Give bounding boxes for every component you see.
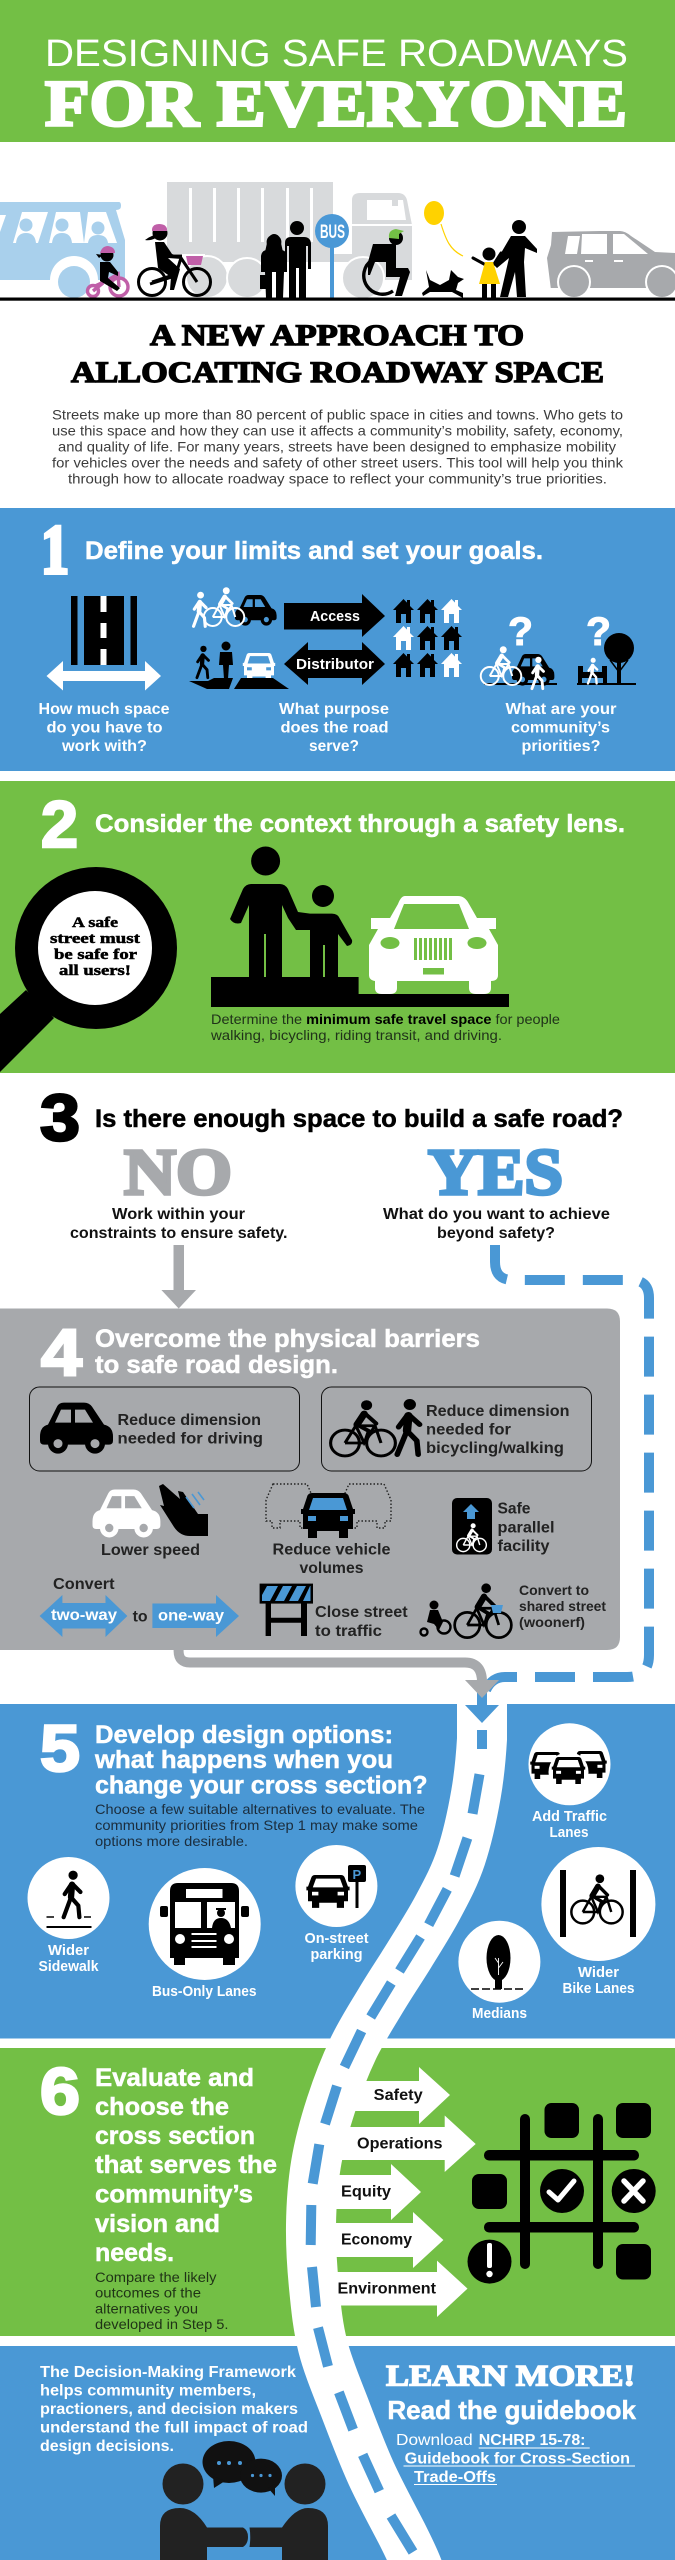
- option: add traffic lanes: Add Traffic: [532, 1808, 607, 1825]
- framework text: helps community members,: [40, 2382, 256, 2400]
- panel: step 3: [40, 1080, 623, 1308]
- question: priorities: priorities?: [522, 738, 600, 755]
- question: space: [38, 701, 170, 755]
- box: reduce bicycling and walking dimension: Reduce dimension: [426, 1403, 570, 1420]
- download link: NCHRP 15-78:: [479, 2432, 586, 2449]
- option: reduce vehicle volumes: [266, 1484, 391, 1577]
- icon: people talking: [160, 2441, 328, 2560]
- title line 1: DESIGNING SAFE ROADWAYS: [45, 33, 628, 75]
- bus stop sign: [315, 214, 349, 298]
- step 6 body: alternatives you: [95, 2300, 198, 2316]
- icon: magnifying glass: A safe: [72, 915, 119, 931]
- icon: magnifying glass: all users!: [59, 963, 131, 979]
- box: reduce bicycling and walking dimension: [322, 1387, 592, 1471]
- arrow: safety: [340, 2067, 450, 2124]
- truck: [167, 182, 412, 299]
- step 5 body: Choose a few suitable alternatives to evaluate. The: [95, 1801, 425, 1817]
- step 4 heading: to safe road design.: [95, 1351, 338, 1379]
- step number 4: 4: [41, 1315, 82, 1389]
- icon: distributor users: [189, 642, 289, 689]
- answer: yes: YES: [428, 1136, 563, 1209]
- option: close street: Close street: [315, 1604, 408, 1621]
- panel: step 2: [0, 781, 675, 1073]
- box: reduce driving dimension: needed for driving: [118, 1430, 263, 1448]
- step 2 heading: Consider the context through a safety lens.: [95, 810, 625, 838]
- couple walking: [260, 221, 311, 298]
- option: wider sidewalk: [28, 1857, 110, 1975]
- arrow: equity: [320, 2164, 421, 2220]
- option: reduce vehicle volumes: volumes: [300, 1560, 364, 1577]
- option: convert two-way to one-way: [40, 1576, 239, 1637]
- arrow: environment: Environment: [338, 2280, 437, 2298]
- road centre dashes: [311, 1730, 482, 2552]
- subtitle: [71, 319, 604, 389]
- option: on-street parking: parking: [310, 1946, 362, 1963]
- question: purpose: What purpose: [279, 701, 389, 718]
- subtitle: A NEW APPROACH TO: [150, 319, 524, 352]
- step 5 heading: [94, 1721, 428, 1800]
- option: lower speed: [92, 1484, 208, 1559]
- icon: houses: [393, 599, 462, 677]
- step 6 heading: that serves the: [95, 2151, 277, 2179]
- option: wider sidewalk: Wider: [48, 1942, 89, 1959]
- caption: Determine the minimum safe travel space for people: [211, 1011, 560, 1027]
- step 5 body: options more desirable.: [95, 1833, 248, 1849]
- question: space: work with?: [61, 738, 147, 755]
- intro paragraph: through how to allocate roadway space to reflect your community’s true priorities.: [68, 470, 607, 486]
- step number 5: 5: [40, 1711, 80, 1785]
- arrow: access: [284, 594, 385, 637]
- option: convert two-way to one-way: one-way: [158, 1608, 224, 1624]
- step 6 heading: cross section: [95, 2122, 255, 2150]
- question: priorities: community’s: [511, 720, 610, 736]
- step 6 heading: [95, 2064, 277, 2267]
- step 6 body: outcomes of the: [95, 2284, 201, 2300]
- question: purpose: does the road: [280, 720, 388, 736]
- learn more heading: LEARN MORE!: [386, 2360, 635, 2392]
- woman cycling: [138, 224, 210, 296]
- icon: adult and child on sidewalk: [211, 846, 509, 1007]
- option: convert two-way to one-way: two-way: [51, 1607, 117, 1624]
- no text: Work within your: [112, 1206, 245, 1223]
- box: reduce driving dimension: [30, 1387, 300, 1471]
- adult pedestrian: [494, 220, 537, 297]
- road line: [0, 298, 675, 301]
- wheelchair user: [364, 229, 410, 296]
- arrow: economy: Economy: [341, 2232, 412, 2248]
- icon: magnifying glass: be safe for: [54, 947, 138, 963]
- option: shared street: [420, 1583, 607, 1638]
- box: reduce bicycling and walking dimension: needed for: [426, 1422, 511, 1438]
- intro paragraph: and quality of life. For many years, streets have been designed to emphasize mobility: [58, 438, 616, 454]
- step 6 heading: choose the: [95, 2093, 229, 2121]
- yes text: beyond safety?: [437, 1225, 555, 1242]
- step 6 heading: vision and: [95, 2210, 220, 2238]
- icon: community priorities: ?: [586, 610, 611, 654]
- panel: learn more: [0, 2346, 675, 2560]
- option: medians: [458, 1921, 540, 2022]
- option: wider bike lanes: [541, 1847, 655, 1997]
- question: priorities: What are your: [506, 701, 616, 718]
- option: convert two-way to one-way: Convert: [53, 1576, 115, 1593]
- option: on-street parking: On-street: [304, 1930, 368, 1947]
- yes text: What do you want to achieve: [383, 1206, 610, 1223]
- step number 1: 1: [41, 512, 69, 589]
- icon: community priorities: ?: [508, 610, 533, 654]
- option: shared street: (woonerf): [519, 1615, 585, 1630]
- step 3 heading: Is there enough space to build a safe road?: [95, 1105, 623, 1133]
- question: space: How much space: [38, 701, 170, 718]
- answer: no: NO: [124, 1136, 232, 1209]
- step 5 body: [95, 1801, 425, 1849]
- question: space: do you have to: [46, 720, 163, 736]
- panel: step 4: [0, 1308, 620, 1650]
- title line 2: FOR EVERYONE: [45, 68, 627, 140]
- child on tricycle: [88, 246, 128, 296]
- no text: [70, 1206, 288, 1242]
- option: safe parallel facility: [452, 1498, 554, 1555]
- subtitle: ALLOCATING ROADWAY SPACE: [71, 356, 604, 389]
- option: wider bike lanes: Wider: [578, 1964, 619, 1981]
- arrow: operations: Operations: [357, 2136, 443, 2152]
- header banner: [0, 0, 675, 142]
- no text: constraints to ensure safety.: [70, 1225, 288, 1242]
- panel: step 5: [0, 1704, 675, 2038]
- arrow: yes dashed path to step 5: [486, 1245, 649, 1690]
- intro paragraph: Streets make up more than 80 percent of public space in cities and towns. Who gets to: [52, 406, 623, 422]
- step number 2: 2: [41, 787, 78, 861]
- arrow: distributor: [284, 642, 385, 685]
- download link: Trade-Offs: [414, 2469, 496, 2486]
- arrow: economy: [320, 2212, 443, 2268]
- intro paragraph: [52, 406, 624, 486]
- gray arrow head: [465, 1680, 499, 1698]
- box: reduce driving dimension: Reduce dimension: [118, 1412, 261, 1429]
- intro paragraph: for vehicles over the needs and safety of other street users. This tool will help you think: [52, 454, 624, 470]
- step 6 body: developed in Step 5.: [95, 2316, 228, 2332]
- option: wider sidewalk: Sidewalk: [38, 1958, 99, 1975]
- step 5 heading: change your cross section?: [95, 1772, 427, 1800]
- framework text: [40, 2364, 308, 2455]
- step 5 body: community priorities from Step 1 may make some: [95, 1817, 418, 1833]
- option: wider bike lanes: Bike Lanes: [562, 1980, 634, 1997]
- read the guidebook: Read the guidebook: [387, 2395, 637, 2425]
- option: add traffic lanes: Lanes: [550, 1824, 588, 1841]
- question: purpose: serve?: [309, 738, 359, 755]
- dog: [422, 270, 464, 298]
- option: close street: to traffic: [315, 1623, 382, 1640]
- arrow: safety: Safety: [374, 2087, 423, 2104]
- option: close street: [260, 1584, 408, 1640]
- step 6 heading: Evaluate and: [95, 2064, 254, 2092]
- road white band: [311, 1704, 482, 2560]
- option: safe parallel facility: facility: [498, 1538, 550, 1555]
- download link: Guidebook for Cross-Section: [405, 2450, 630, 2468]
- parked car: [547, 231, 675, 299]
- step 6 body: [95, 2269, 228, 2332]
- icon: decision grid: [468, 2103, 656, 2284]
- icon: car front: [369, 896, 498, 994]
- bus stop sign: BUS: [320, 222, 345, 243]
- box: reduce bicycling and walking dimension: bicycling/walking: [426, 1440, 564, 1457]
- icon: magnifying glass: [0, 867, 177, 1072]
- arrow: operations: [325, 2116, 476, 2172]
- arrow: access: Access: [310, 608, 360, 625]
- step number 3: 3: [40, 1080, 80, 1154]
- intro paragraph: use this space and how they can use it affects a community’s mobility, safety, economy,: [52, 422, 623, 438]
- step 6 body: Compare the likely: [95, 2269, 216, 2285]
- yes text: [383, 1206, 610, 1242]
- question: purpose: [279, 701, 389, 755]
- step 4 heading: [95, 1325, 480, 1379]
- framework text: The Decision-Making Framework: [40, 2364, 296, 2381]
- arrow: no to step 4: [161, 1245, 196, 1308]
- framework text: understand the full impact of road: [40, 2420, 308, 2436]
- download link: Download: [396, 2432, 473, 2449]
- arrow: environment: [320, 2261, 468, 2317]
- option: bus-only lanes: [149, 1868, 261, 2000]
- child in yellow dress: [473, 248, 501, 298]
- icon: access users: [194, 587, 277, 626]
- icon: community priorities: [481, 610, 636, 689]
- bus: [0, 202, 125, 304]
- option: safe parallel facility: Safe: [498, 1500, 531, 1518]
- step 4 heading: Overcome the physical barriers: [95, 1325, 480, 1353]
- framework text: practioners, and decision makers: [40, 2401, 298, 2418]
- step number 6: 6: [40, 2054, 80, 2128]
- balloon: [424, 201, 463, 256]
- download link: [396, 2432, 635, 2486]
- icon: magnifying glass: street must: [50, 931, 140, 947]
- option: add traffic lanes: [528, 1723, 610, 1841]
- option: on-street parking: [295, 1845, 377, 1963]
- option: shared street: Convert to: [519, 1583, 589, 1598]
- option: reduce vehicle volumes: Reduce vehicle: [272, 1542, 391, 1558]
- arrow: distributor: Distributor: [296, 656, 374, 673]
- option: convert two-way to one-way: to: [133, 1608, 148, 1626]
- option: medians: Medians: [472, 2005, 527, 2022]
- white gaps across road: [320, 2067, 476, 2317]
- option: shared street: shared street: [519, 1599, 607, 1614]
- step 1 heading: Define your limits and set your goals.: [85, 537, 543, 565]
- option: lower speed: Lower speed: [101, 1542, 200, 1559]
- street scene illustration: [0, 182, 675, 304]
- question: priorities: [506, 701, 616, 755]
- caption: walking, bicycling, riding transit, and driving.: [210, 1027, 502, 1043]
- step 5 heading: Develop design options:: [95, 1721, 393, 1749]
- framework text: design decisions.: [40, 2438, 174, 2455]
- blue arrow onto road: [465, 1690, 499, 1723]
- option: on-street parking: P: [352, 1867, 362, 1882]
- step 6 heading: needs.: [95, 2239, 174, 2267]
- arrow: gray path from step 4 to road: [179, 1648, 499, 1723]
- option: safe parallel facility: parallel: [498, 1520, 554, 1536]
- arrow: equity: Equity: [341, 2184, 391, 2200]
- caption: [210, 1011, 560, 1043]
- icon: road width: [46, 596, 161, 690]
- option: bus-only lanes: Bus-Only Lanes: [152, 1983, 256, 2000]
- step 6 heading: community’s: [95, 2180, 253, 2208]
- panel: step 6: [0, 2048, 675, 2336]
- panel: step 1: [0, 508, 675, 771]
- step 5 heading: what happens when you: [94, 1746, 393, 1774]
